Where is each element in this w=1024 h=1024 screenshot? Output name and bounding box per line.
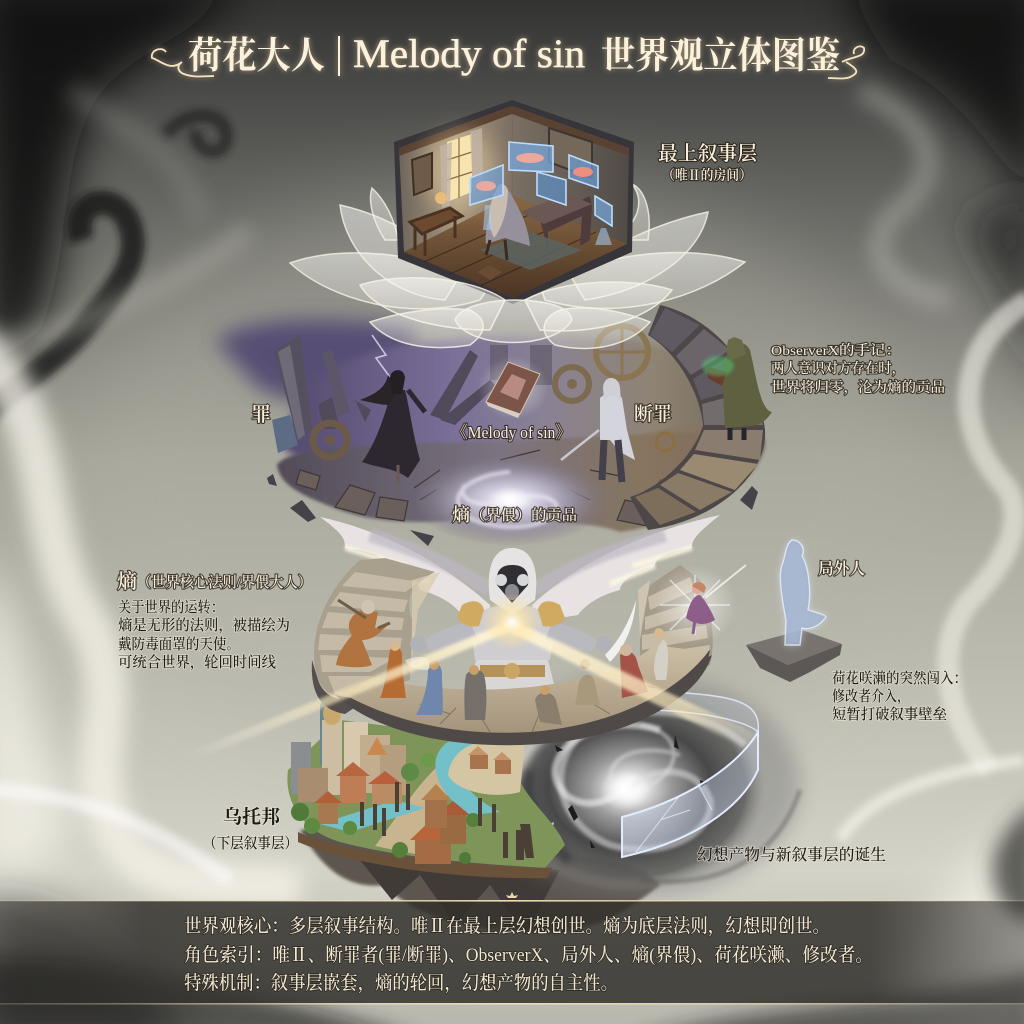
magic book melody of sin [477,356,549,420]
island ground [287,720,565,868]
label: utopia: （下层叙事层） [203,834,298,852]
bottom summary panel [0,892,1024,1005]
figure: angel entropy [405,548,636,709]
tier 4: utopia island and vortex [287,673,800,935]
city buildings [291,695,435,835]
label: tribute of entropy: 熵 [451,505,470,525]
figure: observer x [702,337,772,440]
title [152,31,864,78]
figure: robed believers [380,628,668,725]
left spiral stairs [312,558,440,714]
cracked ground disk [277,432,765,532]
text block: entropy description: 熵 [116,570,137,593]
text block: entropy description: 关于世界的运转： [118,599,224,616]
figure: outsider [746,540,842,682]
label: observerx note: ObserverX的手记： [771,342,901,359]
summary line 1: 世界观核心：多层叙事结构。唯Ⅱ在最上层幻想创世。熵为底层法则，幻想即创世。 [184,914,830,937]
purple storm cloud [215,319,417,410]
text block: entropy description: 可统合世界，轮回时间线 [118,653,276,671]
walled district [448,739,525,795]
floating rock shards [267,474,758,546]
vortex [480,673,800,897]
glowing window [422,128,498,210]
left desk and lamp [410,208,462,256]
figure: warrior on stairs [336,600,390,667]
town square [392,784,480,864]
label: book title: 《Melody of sin》 [452,423,571,442]
writing desk [540,196,592,250]
text block: lotus intrusion [832,669,967,723]
curved stone platform [335,645,712,745]
river [320,735,500,832]
townspeople [360,782,534,860]
label: outsider: 局外人 [818,560,865,578]
text block: lotus intrusion: 修改者介入， [832,687,910,705]
lotus back petals [290,184,745,309]
figure: duan zui silver knight [561,378,635,482]
text block: entropy description [116,570,312,671]
road [375,745,480,855]
ruined pillars [272,334,552,453]
label: observerx note: 世界将归零，沦为熵的贡品 [771,379,945,396]
right spiral stairs [630,305,765,530]
rug [480,232,582,270]
summary line 2: 角色索引：唯Ⅱ、断罪者(罪/断罪)、ObserverX、局外人、熵(界偎)、荷花咲濑、修改者。 [184,944,873,966]
figure: lotus girl with burst [653,565,746,645]
outsider ghost silhouette [780,540,826,645]
outsider floating platform [746,630,842,665]
label: utopia [203,806,298,852]
tier 2: ruins of sin and duan zui [215,305,772,546]
yui long haired figure [486,184,530,260]
wings [320,515,720,622]
room left wall [399,106,513,252]
title text: cjk part 2: 世界观立体图鉴 [601,35,840,77]
figure: zui dark woman [360,370,425,483]
ruin backdrop [285,335,760,484]
rusted gears [313,326,674,457]
title divider [338,36,340,76]
label: birth of new layer: 幻想产物与新叙事层的诞生 [697,845,886,864]
top tier: yui's room [394,100,634,304]
title text: melody of sin: Melody of sin [353,31,585,76]
entropy vortex tribute [412,454,608,546]
text block: lotus intrusion: 荷花咲濑的突然闯入： [832,669,967,687]
holy beams [190,594,760,758]
tier 3: stone stairs, platform and angel [190,515,760,758]
floating rock underside [300,820,660,933]
label: zui: 罪 [251,403,271,426]
label: top narrative layer: 最上叙事层 [658,142,758,165]
label: utopia: 乌托邦 [223,806,280,828]
label: tribute of entropy: （界偎）的贡品 [470,507,577,524]
label: duan zui: 断罪 [634,403,672,425]
right spiral stairs [638,565,713,712]
label: tribute of entropy [451,505,577,525]
lotus front petals [360,278,672,348]
title text: cjk part 1: 荷花大人 [188,35,325,77]
title flourish left [152,49,214,76]
label: top narrative layer: （唯Ⅱ的房间） [662,167,752,184]
text block: entropy description: 戴防毒面罩的天使。 [118,635,240,653]
holographic panels [470,142,612,245]
label: observerx note [771,342,945,396]
room floor [404,196,627,298]
label: top narrative layer [658,142,758,184]
label: observerx note: 两人意识对方存在时， [771,360,905,377]
text block: entropy description: （世界核心法则/界偎大人） [137,573,312,591]
glass panel: new narrative layer [622,692,758,857]
title flourish right [828,46,864,78]
wall painting and map [412,153,432,195]
room right wall [512,106,629,244]
text block: lotus intrusion: 短暂打破叙事壁垒 [832,705,948,723]
old book on floor [477,265,502,280]
text block: entropy description: 熵是无形的法则，被描绘为 [118,616,290,634]
summary line 3: 特殊机制：叙事层嵌套，熵的轮回，幻想产物的自主性。 [184,971,618,994]
